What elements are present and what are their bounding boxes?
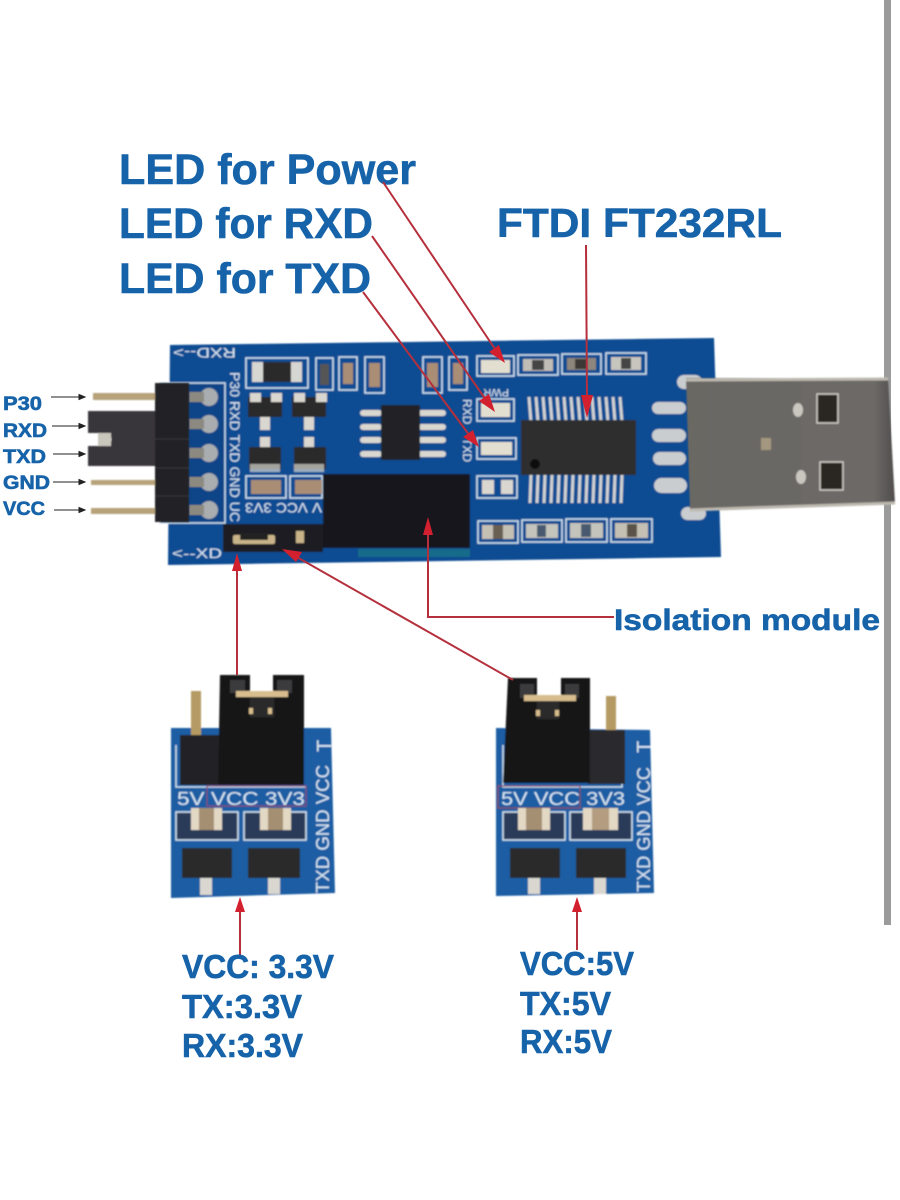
left header pins and jumper [88, 383, 189, 522]
pin labels: P30 [3, 394, 42, 415]
top silkscreen text: RXD--> [173, 345, 236, 361]
left voltage text: TX:3.3V [182, 988, 302, 1025]
LED labels heading [119, 146, 416, 303]
pin labels [3, 394, 50, 520]
arrow: LED for RXD [372, 236, 495, 412]
right voltage text: VCC:5V [520, 945, 634, 982]
pin labels: GND [3, 473, 50, 494]
jumper on PCB [223, 524, 323, 552]
rotated pin labels: P30 RXD TXD GND UC [227, 372, 243, 522]
jumper cap and header pin [503, 678, 625, 784]
left voltage text: RX:3.3V [182, 1027, 303, 1064]
header solder pads [189, 388, 218, 519]
header pin and jumper cap [180, 675, 304, 785]
pin labels: TXD [3, 447, 46, 468]
left jumper module: 3.3V: TXD GND VCC [313, 765, 333, 893]
pin label arrows [51, 394, 85, 512]
isolation module block [323, 474, 470, 548]
USB connector [686, 378, 895, 511]
arrow: left jumper [232, 553, 242, 675]
teal reflection below module [358, 549, 470, 557]
LED parts: PWR [483, 386, 509, 398]
arrow: FTDI chip [581, 245, 593, 418]
LED labels heading: LED for Power [119, 146, 416, 194]
right jumper module: 5V: 5V VCC 3V3 [501, 789, 625, 809]
right voltage text [520, 945, 634, 1060]
arrow: left module [235, 897, 245, 955]
left header silkscreen [160, 383, 225, 523]
LED parts: TXD [460, 438, 474, 462]
scrollbar strip [884, 0, 891, 925]
arrow: LED for TXD [363, 292, 479, 447]
USB connector pads [652, 375, 706, 520]
isolator SOIC chip [360, 405, 446, 460]
left voltage text: VCC: 3.3V [182, 948, 334, 985]
LED labels heading: LED for TXD [119, 255, 371, 303]
top right SMD row [518, 353, 646, 375]
right jumper module: 5V: TXD GND VCC [634, 767, 654, 892]
regulator parts [503, 808, 632, 894]
isolation module label: Isolation module [614, 604, 880, 637]
FT232RL chip [521, 397, 636, 503]
transistors [246, 393, 327, 498]
LED parts [460, 356, 516, 462]
arrow: right module [572, 897, 582, 950]
arrow: isolation module [423, 517, 614, 617]
LED labels heading: LED for RXD [119, 200, 373, 248]
voltage silkscreen text: V VCC 3V3 [245, 500, 322, 516]
regulator parts [176, 808, 306, 895]
right jumper module: 5V: T [634, 741, 656, 753]
FTDI chip heading: FTDI FT232RL [497, 200, 782, 246]
left jumper module: 3.3V [171, 675, 336, 898]
pin labels: VCC [3, 499, 45, 520]
upper-left SMD parts [246, 357, 467, 393]
right jumper module: 5V [496, 678, 656, 896]
arrow: right jumper [282, 549, 513, 680]
right voltage text: TX:5V [520, 985, 611, 1022]
pin labels: RXD [3, 421, 47, 442]
left voltage text [182, 948, 334, 1064]
small pad pair [477, 476, 517, 498]
arrow: LED for Power [383, 182, 505, 363]
right voltage text: RX:5V [520, 1023, 612, 1060]
left jumper module: 3.3V: T [314, 740, 336, 752]
bottom SMD row [478, 519, 652, 543]
LED parts: RXD [460, 399, 474, 425]
left jumper module: 3.3V: 5V VCC 3V3 [177, 789, 305, 809]
bottom silkscreen text: <--XD [172, 545, 222, 561]
main PCB board [160, 338, 721, 565]
